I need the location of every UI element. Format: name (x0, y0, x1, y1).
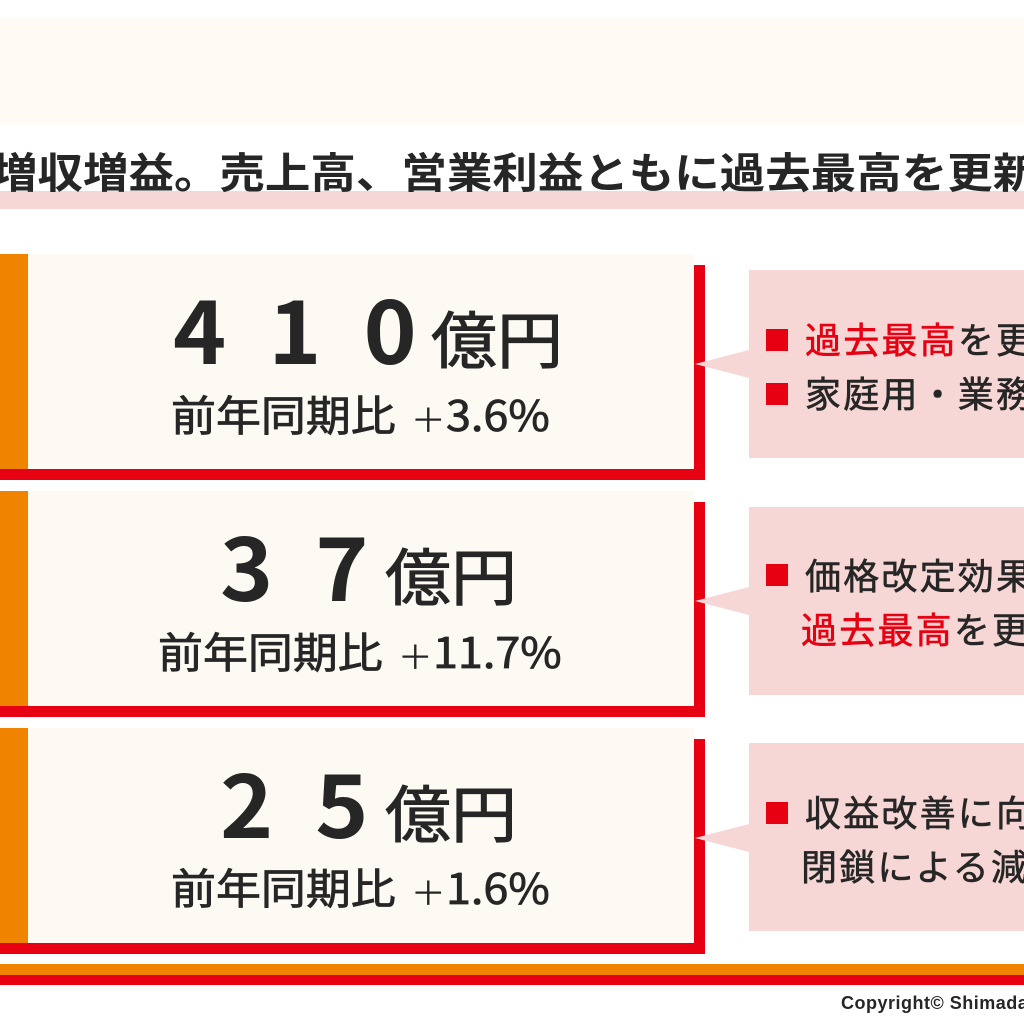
year on year (158, 620, 562, 681)
year on year: 前年同期比 (171, 383, 396, 444)
red bottom border (0, 469, 705, 480)
unit: 億円 (385, 765, 517, 855)
bullet (766, 564, 788, 586)
red right border (694, 739, 705, 954)
pointer: sales (695, 350, 749, 378)
red stripe (0, 975, 1024, 985)
orange tab (0, 254, 28, 469)
value: 410: 410 (173, 264, 459, 389)
year on year (171, 856, 550, 917)
pointer: operating profit (695, 587, 749, 615)
card: operating profit: ＋ (398, 631, 433, 679)
card: sales (0, 254, 705, 480)
red bottom border (0, 706, 705, 717)
subtitle text: 増収増益。売上高、営業利益ともに過去最高を更新 (0, 140, 1024, 201)
card: sales: 3.6% (446, 383, 550, 444)
red bottom border (0, 943, 705, 954)
card: ordinary profit: ＋ (411, 867, 446, 915)
subtitle highlight bar (0, 191, 1024, 209)
card background (0, 728, 694, 943)
bullet (766, 329, 788, 351)
pointer: ordinary profit (695, 824, 749, 852)
note line 2: 閉鎖による減 (801, 839, 1024, 891)
footer stripes (0, 964, 1024, 985)
unit: 億円 (385, 528, 517, 618)
value: 25: 25 (220, 738, 411, 863)
year on year: 前年同期比 (158, 620, 383, 681)
subtitle with highlight (0, 140, 1024, 209)
unit: 億円 (431, 291, 563, 381)
card: sales: ＋ (411, 394, 446, 442)
card: ordinary profit (0, 728, 705, 954)
note: sales (749, 270, 1024, 458)
year on year: 前年同期比 (171, 856, 396, 917)
bullet (766, 383, 788, 405)
red right border (694, 502, 705, 717)
orange stripe (0, 964, 1024, 975)
card: operating profit: 11.7% (433, 620, 562, 681)
red right border (694, 265, 705, 480)
note: operating profit (749, 507, 1024, 695)
card: operating profit (0, 491, 705, 717)
value: 37: 37 (220, 501, 411, 626)
title band (0, 18, 1024, 125)
card: ordinary profit: 1.6% (446, 856, 550, 917)
orange tab (0, 728, 28, 943)
orange tab (0, 491, 28, 706)
bullet (766, 802, 788, 824)
card background (0, 491, 694, 706)
year on year (171, 383, 550, 444)
note: ordinary profit (749, 743, 1024, 931)
card background (0, 254, 694, 469)
